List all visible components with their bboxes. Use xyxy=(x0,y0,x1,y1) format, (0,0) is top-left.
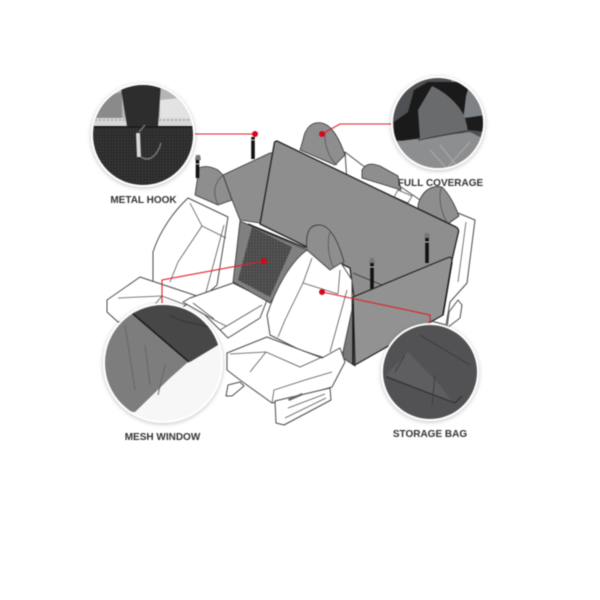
left front seat xyxy=(107,198,228,322)
photo xyxy=(103,303,223,423)
callout: storage bag xyxy=(319,289,480,440)
connector xyxy=(322,124,393,134)
photo xyxy=(381,323,479,421)
backrest xyxy=(267,250,352,360)
rear cover panel xyxy=(260,141,459,298)
rear bench seat xyxy=(345,152,475,325)
center console xyxy=(183,283,267,338)
left side cover panel with headrest xyxy=(195,153,273,223)
right front cover panel xyxy=(343,257,452,366)
right front seat xyxy=(226,225,352,425)
rear headrests xyxy=(300,123,459,226)
label: MESH WINDOW xyxy=(125,432,201,443)
connector xyxy=(162,261,264,305)
label: METAL HOOK xyxy=(110,195,177,206)
photo xyxy=(91,83,195,187)
back divider with mesh window xyxy=(233,221,307,303)
seat base xyxy=(275,388,331,425)
photo xyxy=(391,76,485,170)
connector xyxy=(195,133,255,135)
mesh window panel xyxy=(238,227,292,297)
infographic xyxy=(88,74,488,441)
label: STORAGE BAG xyxy=(393,429,467,440)
callout: mesh window xyxy=(100,258,267,443)
connector xyxy=(322,292,430,325)
label: FULL COVERAGE xyxy=(398,178,484,189)
headrest xyxy=(307,225,344,272)
seat cushion xyxy=(227,337,345,403)
seat belt straps xyxy=(195,137,430,289)
callout: metal hook xyxy=(90,80,258,206)
callout: full coverage xyxy=(319,75,486,189)
right rear seat side xyxy=(447,300,462,328)
